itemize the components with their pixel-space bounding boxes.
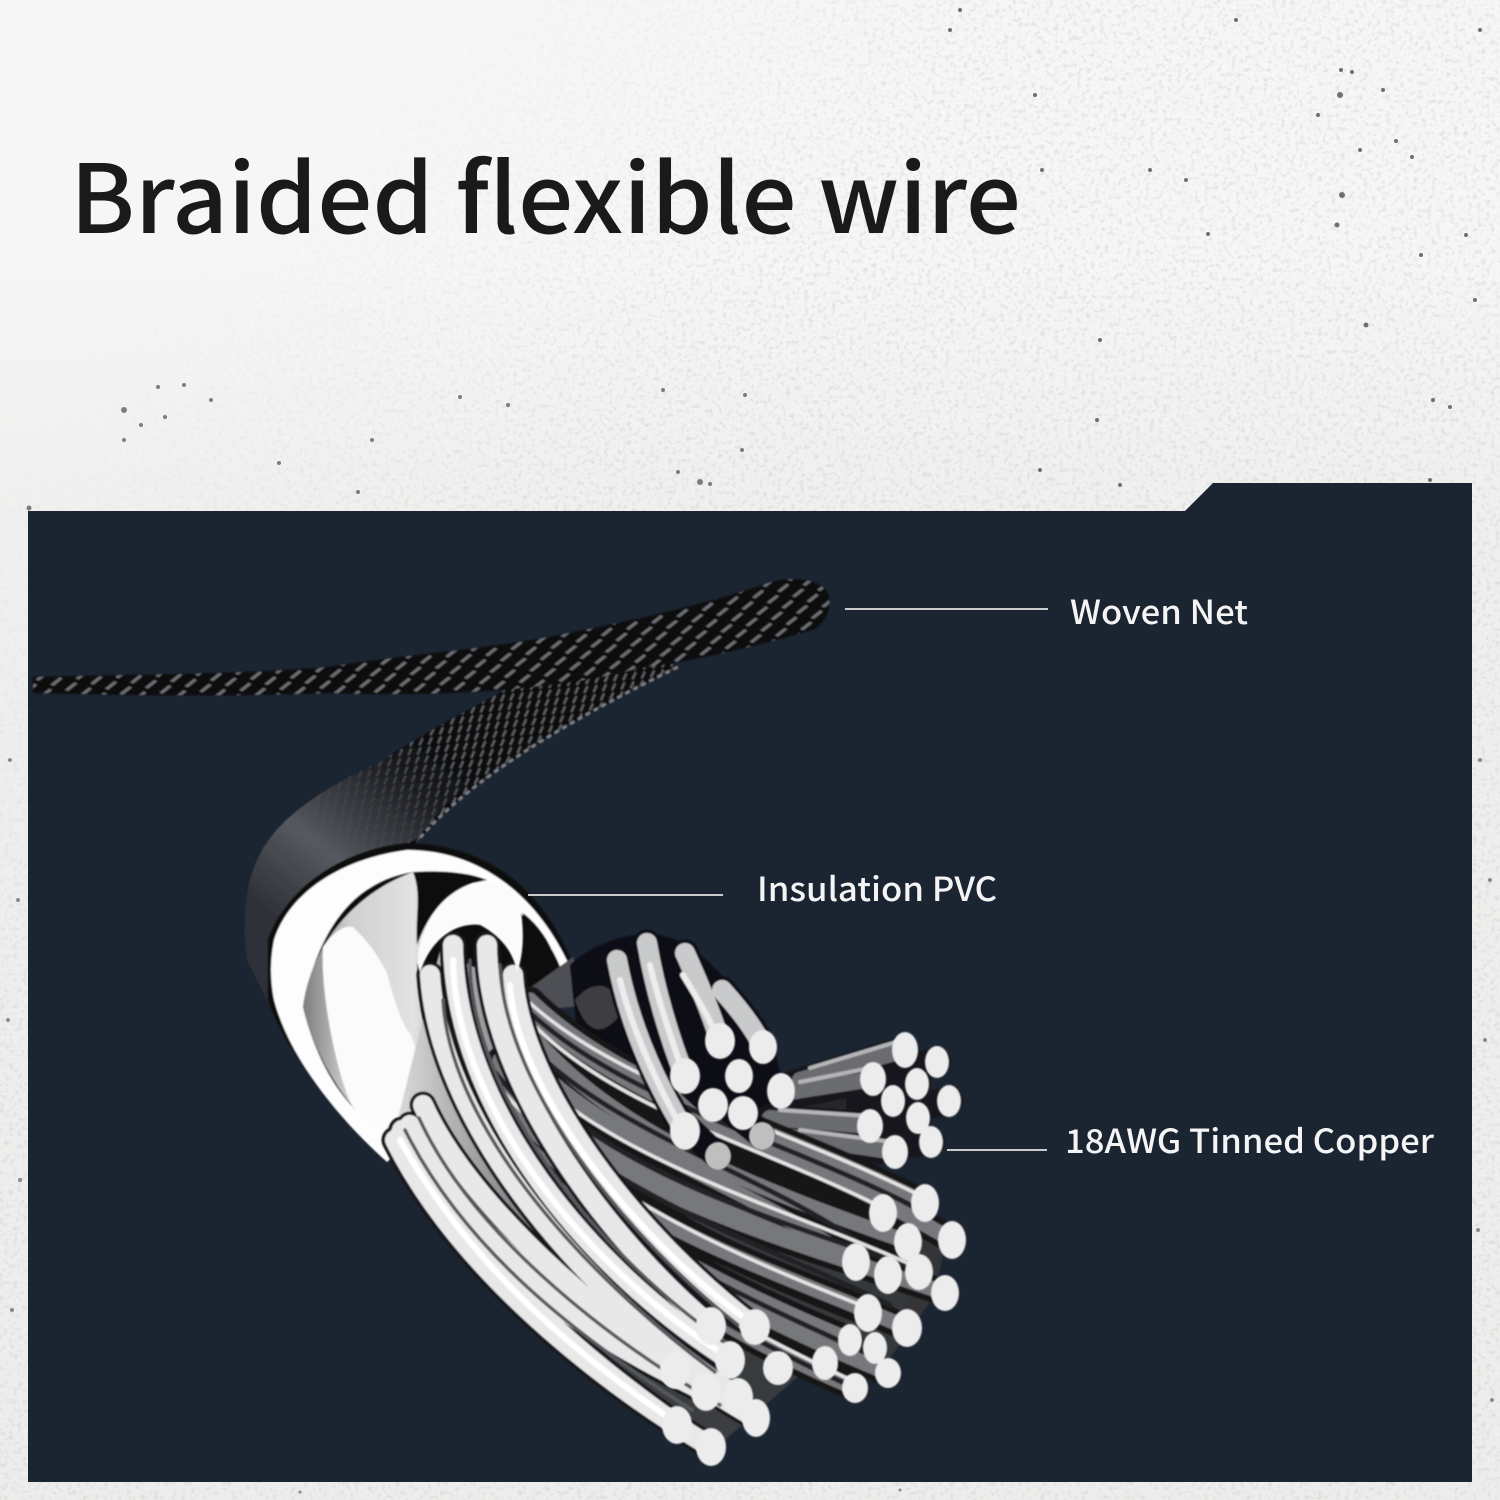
panel: dark navy background with notched corner [28,483,1472,1482]
title: Braided flexible wire [70,124,1021,261]
callout: Insulation PVC: Insulation PVC [757,863,997,911]
middle strands [470,1000,952,1388]
tinned copper strands [395,934,952,1447]
back strands, right cluster [770,1050,949,1152]
strand end faces [660,1023,966,1466]
cable: upper woven net section [33,579,829,695]
sleeve inner hood around strands [417,882,523,973]
right cluster mass [785,1045,930,1155]
callout: 18AWG Tinned Copper: 18AWG Tinned Copper [1065,1115,1435,1163]
cable: lower braided section bending into the sheath [245,658,678,1010]
callout: Woven Net: Woven Net [1070,586,1248,634]
insulation PVC sleeve [268,843,592,1162]
dark mass behind top strands [570,934,790,1170]
illustration: braided cable with exposed strands [33,579,966,1466]
top bundle strands [617,943,781,1156]
central bundle mass [395,950,945,1440]
front bright strands [395,945,756,1447]
